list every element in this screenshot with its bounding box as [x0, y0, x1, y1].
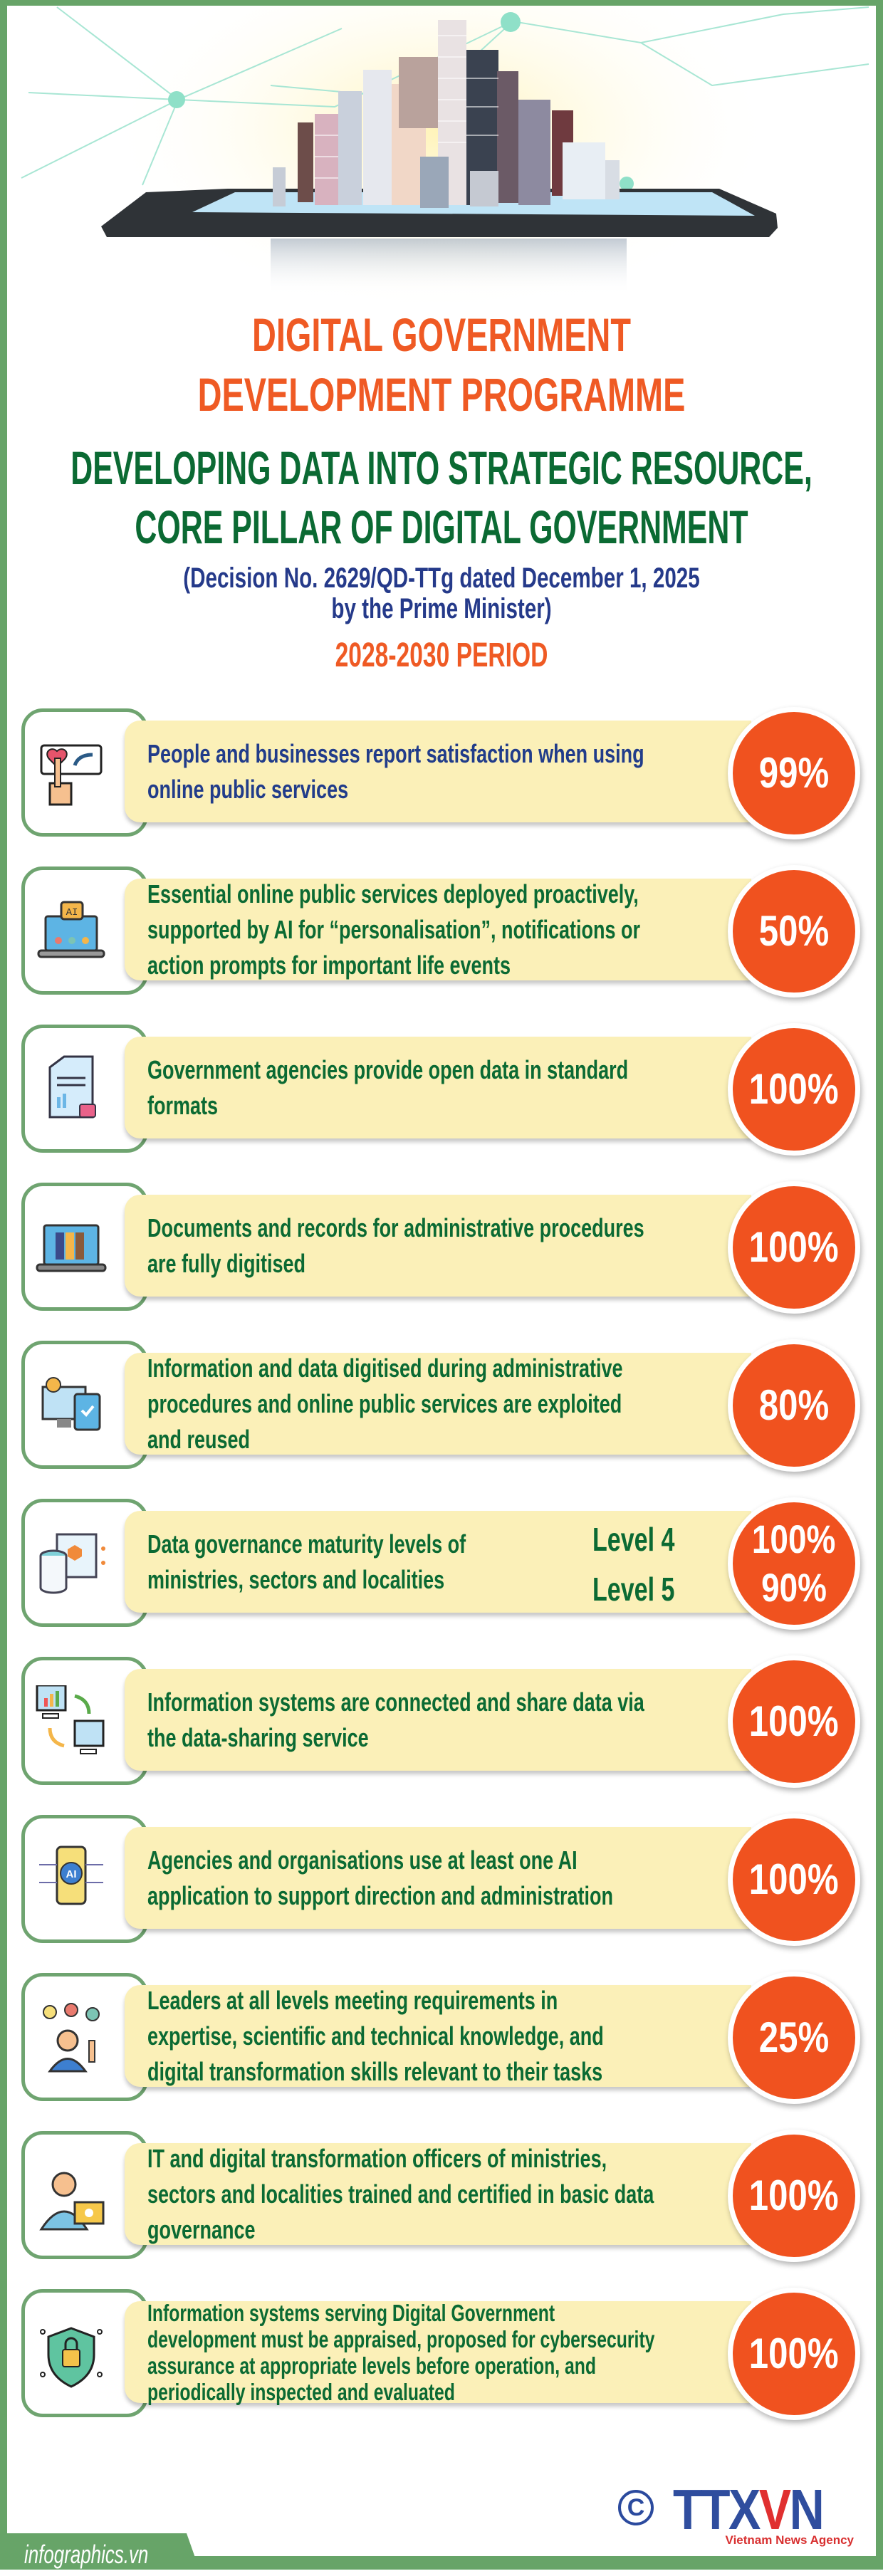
icon: data sharing monitors [36, 1685, 104, 1754]
row 6 [21, 1497, 864, 1636]
value: 100% [749, 2172, 839, 2219]
icon: certified officer [39, 2172, 104, 2230]
text: Information systems serving Digital Government [147, 2300, 555, 2325]
icon: leader with ideas [43, 2003, 100, 2072]
text [147, 1213, 644, 1277]
value: 100% [749, 1223, 839, 1271]
decision note: (Decision No. 2629/QD-TTg dated December 1, 2025 [183, 562, 700, 594]
text: procedures and online public services are exploited [147, 1388, 622, 1418]
row 3 [21, 1022, 864, 1162]
decision note [183, 562, 700, 624]
text: digital transformation skills relevant to their tasks [147, 2056, 602, 2086]
text [147, 1687, 644, 1752]
value: 100% [749, 1697, 839, 1745]
row 11 [21, 2287, 864, 2426]
value: 100% [752, 1517, 836, 1561]
text: formats [147, 1091, 218, 1119]
value [728, 865, 860, 998]
value: 50% [759, 907, 829, 955]
row 10 [21, 2129, 864, 2268]
subtitle: CORE PILLAR OF DIGITAL GOVERNMENT [135, 501, 748, 553]
text [147, 1845, 613, 1910]
icon: AI laptop: AI [66, 907, 78, 918]
text: application to support direction and administration [147, 1881, 613, 1910]
text: Leaders at all levels meeting requirements in [147, 1985, 558, 2015]
text [147, 1985, 604, 2086]
text [147, 1055, 628, 1119]
logo: TTXVN: TTXVN [673, 2478, 822, 2541]
value: 99% [759, 749, 829, 797]
row 4 [21, 1180, 864, 1320]
icon: AI phone: AI [66, 1868, 77, 1880]
footer band [0, 2556, 883, 2570]
text: action prompts for important life events [147, 950, 511, 980]
icon: AI phone [39, 1845, 103, 1905]
text: People and businesses report satisfaction when using [147, 739, 644, 768]
value [728, 1972, 860, 2104]
icon: hand heart [40, 745, 103, 806]
phone [101, 189, 778, 237]
value: 25% [759, 2014, 829, 2061]
footer tab: infographics.vn [0, 2533, 199, 2570]
text [147, 2300, 655, 2405]
value: 100% [749, 1065, 839, 1113]
text [147, 879, 640, 980]
value: 100% [749, 1855, 839, 1903]
levels: Level 4 [592, 1521, 674, 1558]
text: are fully digitised [147, 1249, 305, 1277]
text [147, 1353, 623, 1454]
text: and reused [147, 1424, 250, 1454]
icon: computer with gears [41, 1377, 101, 1431]
text [147, 1529, 466, 1593]
text: Agencies and organisations use at least one AI [147, 1845, 578, 1874]
row 2 [21, 864, 864, 1004]
text [147, 2143, 654, 2244]
value [728, 707, 860, 839]
value [728, 1497, 860, 1630]
text: expertise, scientific and technical knowledge, and [147, 2021, 604, 2051]
logo: TTXVN: Vietnam News Agency [726, 2533, 854, 2547]
value [728, 2288, 860, 2420]
value: 80% [759, 1381, 829, 1429]
text: periodically inspected and evaluated [147, 2378, 455, 2405]
title [198, 308, 685, 421]
icon: open data file [48, 1055, 96, 1118]
copyright mark: C [627, 2494, 644, 2521]
text: Government agencies provide open data in standard [147, 1055, 628, 1084]
buildings [273, 20, 620, 208]
text: ministries, sectors and localities [147, 1565, 444, 1593]
text: supported by AI for “personalisation”, notifications or [147, 914, 640, 944]
text: online public services [147, 775, 348, 803]
hero illustration: city on phone [21, 6, 869, 276]
value [728, 1655, 860, 1788]
text: Information systems are connected and share data via [147, 1687, 644, 1716]
decision note: by the Prime Minister) [331, 593, 552, 624]
value [728, 2130, 860, 2262]
text: development must be appraised, proposed for cybersecurity [147, 2325, 654, 2352]
value [728, 1813, 860, 1946]
text: IT and digital transformation officers of ministries, [147, 2143, 607, 2173]
row 9 [21, 1971, 864, 2110]
icon: laptop with folders [36, 1225, 107, 1272]
value: 90% [761, 1565, 827, 1610]
copyright mark [618, 2490, 654, 2525]
levels: Level 5 [592, 1571, 674, 1608]
text: Data governance maturity levels of [147, 1529, 466, 1558]
text: Information and data digitised during administrative [147, 1353, 623, 1383]
value [728, 1339, 860, 1472]
levels [592, 1521, 675, 1608]
period: 2028-2030 PERIOD [335, 637, 548, 674]
text: sectors and localities trained and certified in basic data [147, 2179, 654, 2209]
title: DIGITAL GOVERNMENT [252, 308, 631, 361]
text: the data-sharing service [147, 1723, 369, 1752]
text: Documents and records for administrative procedures [147, 1213, 644, 1242]
icon: cyber shield [40, 2327, 103, 2388]
value [728, 1023, 860, 1156]
row 8 [21, 1813, 864, 1952]
row 7 [21, 1655, 864, 1794]
footer tab: infographics.vn: infographics.vn [24, 2540, 148, 2569]
icon: database governance [40, 1534, 105, 1593]
title: DEVELOPMENT PROGRAMME [198, 368, 685, 421]
subtitle [70, 441, 813, 553]
subtitle: DEVELOPING DATA INTO STRATEGIC RESOURCE, [70, 441, 813, 494]
row 1 [21, 706, 864, 846]
value: 100% [749, 2330, 839, 2377]
text [147, 739, 644, 803]
text: governance [147, 2214, 256, 2244]
text: Essential online public services deployed proactively, [147, 879, 639, 909]
icon: AI laptop [37, 901, 105, 958]
text: assurance at appropriate levels before operation, and [147, 2352, 596, 2378]
row 5 [21, 1339, 864, 1478]
value [728, 1181, 860, 1314]
